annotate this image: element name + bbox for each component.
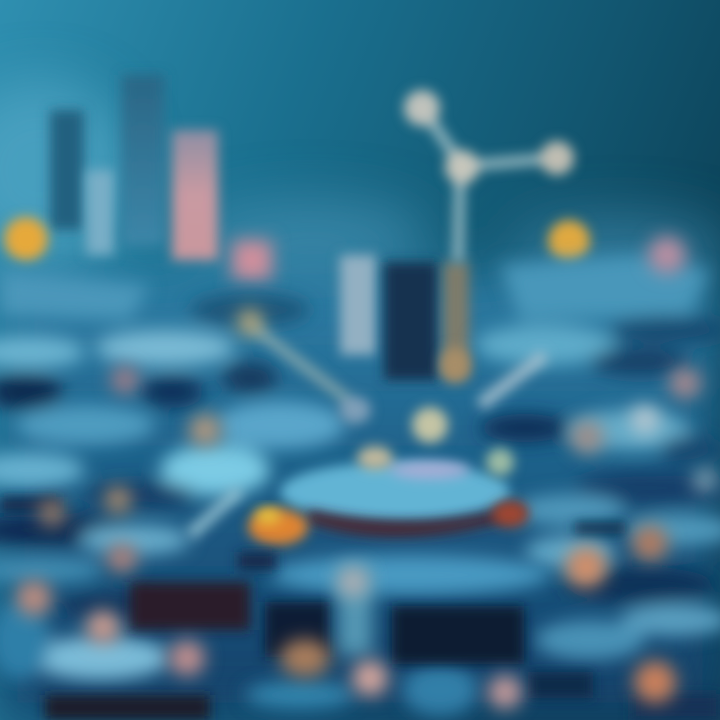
tower: tan mast (443, 262, 469, 377)
tower: pale centre (340, 255, 376, 355)
beam: right diagonal (480, 355, 545, 405)
beam: left diagonal (250, 325, 355, 405)
city block layers (0, 255, 720, 716)
platform: yellow highlight (255, 508, 281, 524)
dark undercity masses (0, 497, 720, 720)
network node: right (540, 141, 574, 175)
central column (338, 565, 372, 655)
platform: lower band (270, 555, 550, 595)
network links (422, 108, 556, 262)
tower: far left (50, 110, 84, 230)
tower: pale left column (86, 170, 114, 255)
platform: dark rim (305, 505, 525, 537)
glowing yellow orbs (4, 217, 590, 262)
tower: dark centre (384, 262, 438, 380)
warm window lights (16, 236, 717, 709)
central platform disc (248, 462, 550, 595)
network node: top (404, 90, 440, 126)
orb: left (4, 217, 48, 261)
centre glow (412, 407, 448, 443)
platform: top surface (280, 462, 510, 522)
platform: red accent (492, 501, 528, 527)
tower: pink low (232, 240, 272, 280)
beam: lower left (190, 490, 240, 535)
beams and glowing centre (190, 325, 545, 535)
orb: right (548, 220, 590, 262)
tower: dark tall (122, 75, 164, 245)
network molecule icon (404, 90, 574, 262)
network node: centre (445, 150, 479, 184)
tower: pink (172, 130, 218, 260)
skyline towers (50, 75, 469, 380)
mast lower glow (440, 347, 470, 383)
platform: orange glow (248, 509, 308, 545)
